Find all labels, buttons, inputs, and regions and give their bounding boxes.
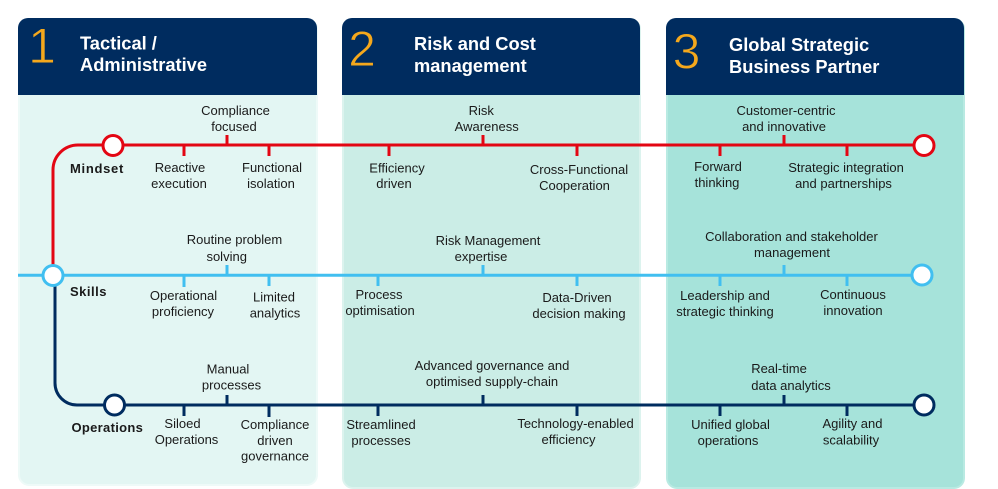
text: stage 1 mindset bbox=[151, 103, 302, 191]
node: mindset end bbox=[914, 136, 934, 156]
text: stage 1 skills bbox=[150, 232, 301, 320]
label: Mindset: Mindset bbox=[70, 161, 124, 176]
label: Skills: Skills bbox=[70, 284, 107, 299]
node: operations end bbox=[914, 395, 934, 415]
text: stage 2 operations: Advanced governance and bbox=[415, 358, 569, 373]
panel: stage 3 bbox=[666, 18, 964, 488]
header: stage 3: 3 bbox=[673, 24, 700, 80]
text: stage 3 operations: Real-time bbox=[751, 361, 807, 376]
node: skills end bbox=[912, 265, 932, 285]
text: stage 3 mindset: thinking bbox=[695, 175, 739, 190]
text: stage 2 skills: Process bbox=[356, 287, 403, 302]
text: stage 3 operations: operations bbox=[698, 433, 759, 448]
text: stage 3 skills bbox=[676, 229, 886, 319]
text: stage 2 skills: Data-Driven bbox=[542, 290, 612, 305]
text: stage 1 skills: analytics bbox=[250, 306, 301, 320]
text: stage 3 skills: Continuous bbox=[820, 287, 886, 302]
text: stage 1 mindset: execution bbox=[151, 176, 207, 191]
text: stage 1 skills: Routine problem bbox=[187, 232, 282, 247]
header: stage 1: Tactical / bbox=[80, 32, 157, 54]
text: stage 3 mindset: and innovative bbox=[742, 119, 826, 134]
text: stage 2 operations: optimised supply-chain bbox=[426, 374, 558, 389]
node: mindset start bbox=[103, 136, 123, 156]
text: stage 2 operations bbox=[346, 358, 634, 448]
text: stage 3 operations: data analytics bbox=[751, 378, 831, 393]
text: stage 2 operations: Streamlined bbox=[346, 417, 416, 432]
text: stage 1 operations bbox=[155, 362, 309, 464]
line: skills bbox=[18, 265, 922, 287]
text: stage 1 operations: governance bbox=[241, 448, 309, 464]
text: stage 2 skills: optimisation bbox=[345, 303, 415, 318]
node: skills start bbox=[43, 266, 63, 286]
text: stage 3 skills: innovation bbox=[823, 303, 883, 318]
text: stage 1 mindset: Compliance bbox=[201, 103, 270, 118]
text: stage 2 skills bbox=[345, 233, 626, 321]
text: stage 2 skills: Risk Management bbox=[436, 233, 541, 248]
text: stage 3 mindset: Strategic integration bbox=[788, 160, 904, 175]
text: stage 1 mindset: Reactive bbox=[155, 160, 205, 175]
line: operations bbox=[55, 275, 924, 417]
panel: stage 2 bbox=[342, 18, 640, 488]
text: stage 1 mindset: focused bbox=[211, 119, 257, 134]
text: stage 3 operations: Agility and bbox=[823, 416, 882, 431]
header: stage 3: Business Partner bbox=[729, 56, 879, 77]
text: stage 3 skills: Leadership and bbox=[680, 288, 770, 303]
text: stage 3 mindset: Customer-centric bbox=[737, 103, 836, 118]
header: stage 3 bbox=[666, 18, 964, 95]
text: stage 2 mindset: Cooperation bbox=[539, 178, 610, 193]
text: stage 1 operations: driven bbox=[257, 433, 293, 448]
text: stage 1 skills: Operational bbox=[150, 288, 217, 303]
header: stage 1: Administrative bbox=[80, 54, 207, 75]
text: stage 2 mindset: Cross-Functional bbox=[530, 162, 628, 177]
header: stage 2: 2 bbox=[348, 21, 376, 77]
text: stage 1 skills: proficiency bbox=[152, 304, 215, 319]
text: stage 2 operations: Technology-enabled bbox=[517, 416, 634, 431]
text: stage 3 operations: Unified global bbox=[691, 417, 770, 432]
text: stage 3 mindset bbox=[694, 103, 904, 191]
header: stage 2: management bbox=[414, 55, 527, 76]
line: mindset bbox=[53, 135, 924, 265]
text: stage 1 operations: processes bbox=[202, 378, 262, 392]
node: operations start bbox=[104, 395, 124, 415]
header: stage 3: Global Strategic bbox=[729, 34, 869, 55]
header: stage 2: Risk and Cost bbox=[414, 33, 536, 54]
text: stage 1 operations: Compliance bbox=[241, 417, 309, 432]
text: stage 1 operations: Siloed bbox=[164, 416, 201, 431]
text: stage 1 skills: solving bbox=[206, 249, 247, 264]
text: stage 2 mindset: Awareness bbox=[455, 119, 519, 134]
text: stage 1 operations: Operations bbox=[155, 432, 219, 447]
text: stage 2 skills: decision making bbox=[532, 306, 626, 321]
text: stage 3 operations: scalability bbox=[823, 432, 880, 448]
header: stage 1 bbox=[18, 18, 317, 95]
panel: stage 1 bbox=[18, 18, 317, 485]
text: stage 2 operations: efficiency bbox=[542, 432, 596, 447]
text: stage 2 skills: expertise bbox=[455, 249, 507, 264]
text: stage 3 skills: Collaboration and stakeholder bbox=[705, 229, 879, 244]
text: stage 2 mindset: driven bbox=[376, 176, 412, 191]
header: stage 2 bbox=[342, 18, 640, 95]
text: stage 2 mindset: Risk bbox=[469, 103, 494, 118]
text: stage 2 operations: processes bbox=[351, 433, 411, 448]
header: stage 1: 1 bbox=[28, 18, 56, 74]
text: stage 3 skills: management bbox=[754, 245, 830, 260]
text: stage 1 mindset: isolation bbox=[247, 176, 295, 191]
text: stage 3 mindset: Forward bbox=[694, 159, 742, 174]
text: stage 3 skills: strategic thinking bbox=[676, 304, 774, 319]
text: stage 1 mindset: Functional bbox=[242, 160, 302, 175]
text: stage 3 operations bbox=[691, 361, 882, 448]
text: stage 2 mindset bbox=[369, 103, 628, 193]
text: stage 1 skills: Limited bbox=[253, 290, 295, 304]
text: stage 2 mindset: Efficiency bbox=[369, 160, 425, 176]
text: stage 3 mindset: and partnerships bbox=[795, 176, 892, 191]
label: Operations: Operations bbox=[72, 420, 143, 435]
text: stage 1 operations: Manual bbox=[207, 362, 249, 376]
